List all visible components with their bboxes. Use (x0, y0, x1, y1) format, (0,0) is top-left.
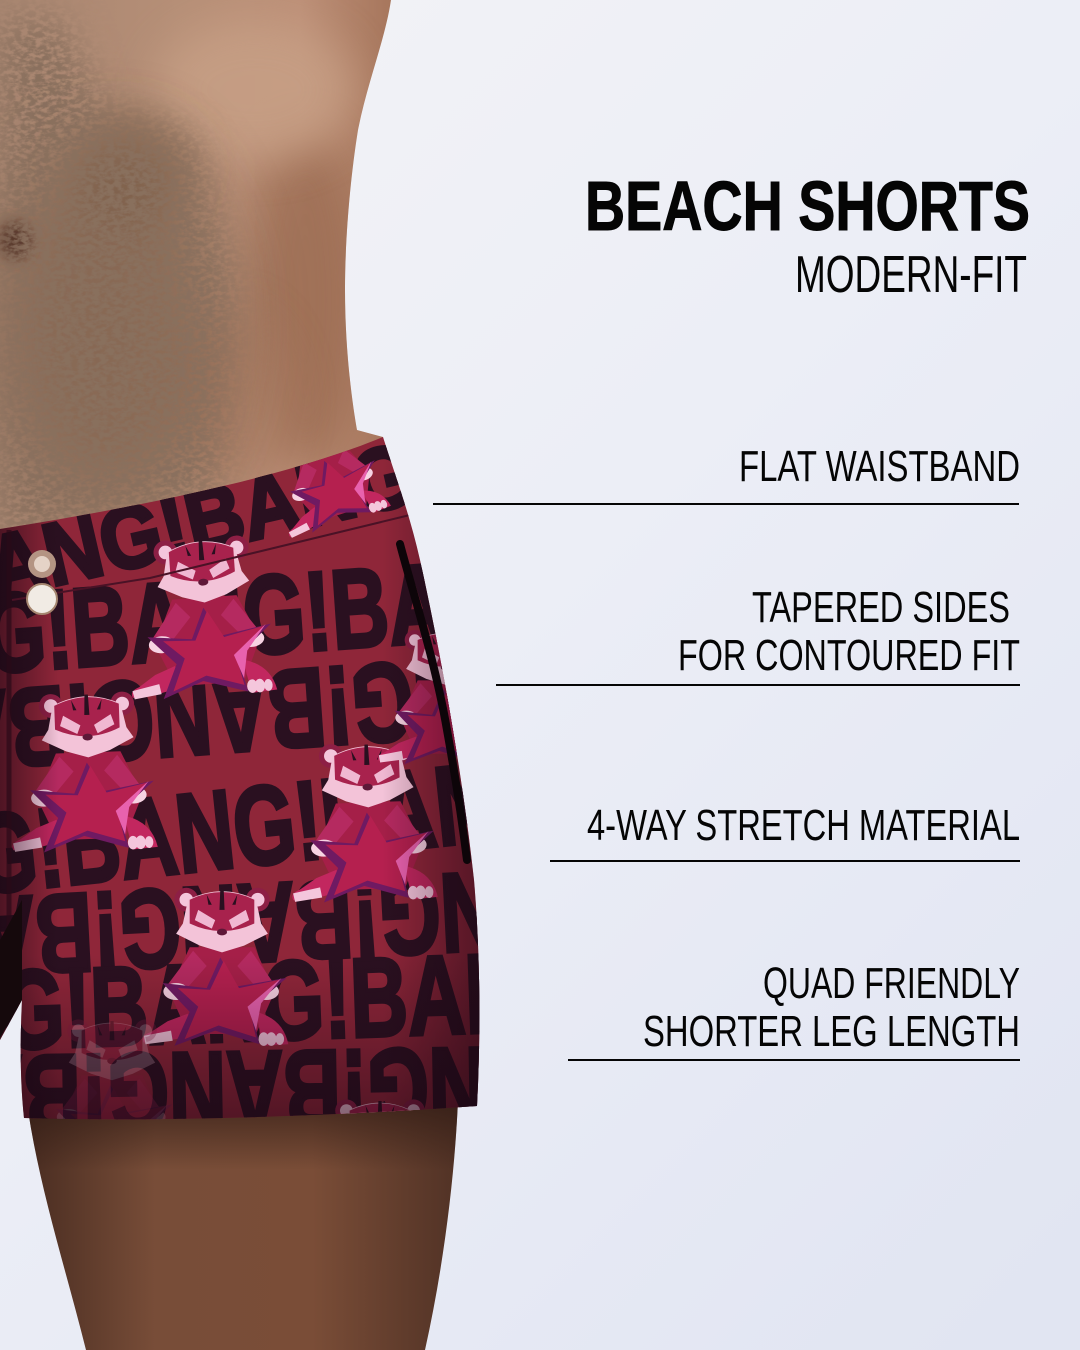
far leg shadow (0, 900, 22, 1038)
button snaps (27, 550, 57, 614)
pattern: tiger and star mascots (12, 450, 479, 1120)
waistband seam (12, 515, 410, 600)
pattern: BANG! lettering rows (0, 445, 480, 1120)
side and hem shading (0, 486, 480, 1118)
photo: printed beach shorts (0, 437, 480, 1120)
side pocket zipper (400, 544, 467, 860)
photo: model torso (0, 0, 400, 570)
feature: shorter leg length (568, 959, 1020, 1061)
photo: model thigh (20, 1095, 470, 1350)
feature: tapered sides (496, 583, 1020, 686)
